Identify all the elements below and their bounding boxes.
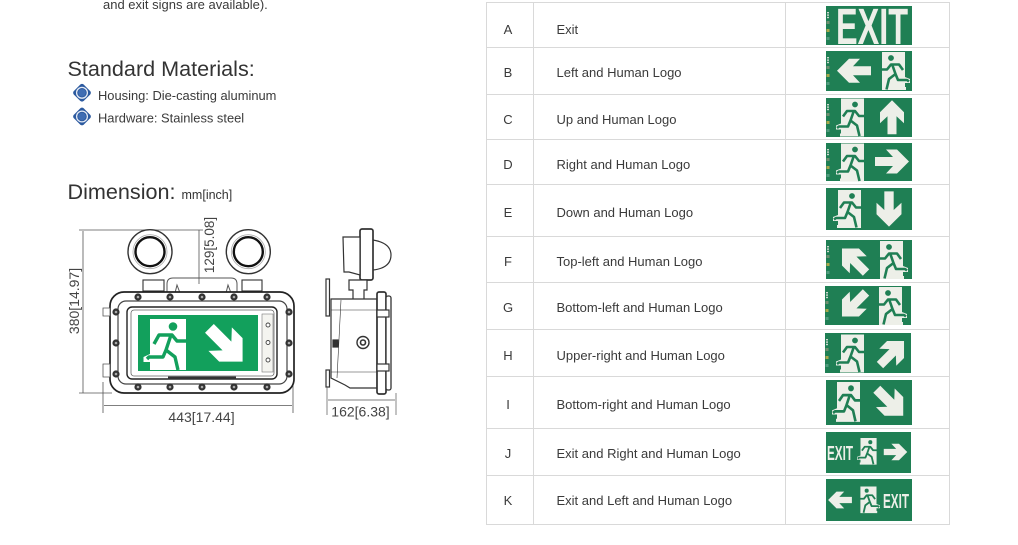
sign: exit — [826, 0, 912, 55]
side lamp — [343, 229, 391, 300]
indicator panel — [262, 314, 273, 372]
sign: bottom-left arrow — [825, 284, 911, 325]
sign: right arrow — [826, 143, 912, 182]
row I: I — [506, 397, 510, 412]
row F: Top-left and Human Logo — [556, 254, 702, 269]
row E: Down and Human Logo — [556, 205, 693, 220]
width label: 443[17.44] — [168, 409, 235, 425]
green running man sign — [138, 315, 258, 373]
row A: A — [504, 22, 513, 37]
row H: Upper-right and Human Logo — [556, 348, 725, 363]
icon: blue diamond bullet — [72, 107, 92, 126]
row A — [504, 22, 579, 37]
table of sign types — [486, 0, 950, 524]
row A: Exit — [556, 22, 579, 37]
sign: down arrow — [826, 188, 912, 230]
table grid — [486, 2, 950, 524]
housing body — [103, 292, 294, 393]
depth dimension lines — [327, 387, 396, 415]
row J: Exit and Right and Human Logo — [556, 446, 741, 461]
heading: dimension: Dimension: mm[inch] — [68, 179, 232, 204]
row I: Bottom-right and Human Logo — [556, 397, 731, 412]
sign: left arrow — [826, 51, 912, 91]
side view dimension drawing — [326, 229, 396, 420]
sign: exit and left arrow: EXIT — [883, 491, 909, 513]
front view dimension drawing — [66, 217, 294, 425]
row K: K — [504, 493, 513, 508]
dimension lines — [79, 230, 293, 413]
row C: Up and Human Logo — [556, 112, 676, 127]
sign: exit and left arrow — [826, 479, 912, 521]
bolts — [112, 293, 293, 391]
heading: standard materials: Standard Materials: — [68, 56, 255, 81]
row G: G — [503, 300, 513, 315]
sign: exit and right arrow — [826, 432, 911, 473]
row G: Bottom-left and Human Logo — [556, 300, 723, 315]
row E: E — [504, 205, 513, 220]
housing material: Housing: Die-casting aluminum — [98, 88, 276, 103]
row H: H — [503, 348, 513, 363]
sign: top-left arrow — [826, 240, 912, 281]
materials list — [72, 83, 276, 126]
depth label: 162[6.38] — [331, 404, 390, 420]
sign: exit and right arrow: EXIT — [827, 443, 853, 465]
nameplate text strip — [168, 376, 236, 380]
row D: Right and Human Logo — [556, 157, 690, 172]
hardware material: Hardware: Stainless steel — [98, 110, 244, 126]
row C — [503, 112, 676, 127]
row F: F — [504, 254, 512, 269]
sign: up arrow — [826, 98, 912, 137]
row B: B — [504, 65, 512, 80]
icon: blue diamond bullet — [72, 83, 92, 103]
lamp height label: 129[5.08] — [202, 217, 217, 273]
handle — [167, 278, 237, 293]
row K: Exit and Left and Human Logo — [556, 493, 732, 508]
right lamp — [226, 230, 270, 291]
row C: C — [503, 112, 513, 127]
total height label: 380[14.97] — [66, 268, 82, 334]
row D: D — [503, 157, 513, 172]
sign: bottom-right arrow — [826, 380, 913, 425]
row J: J — [505, 446, 511, 461]
side housing — [326, 279, 391, 394]
left lamp — [128, 230, 172, 291]
sign: upper-right arrow — [825, 332, 913, 374]
row B: Left and Human Logo — [556, 65, 682, 80]
